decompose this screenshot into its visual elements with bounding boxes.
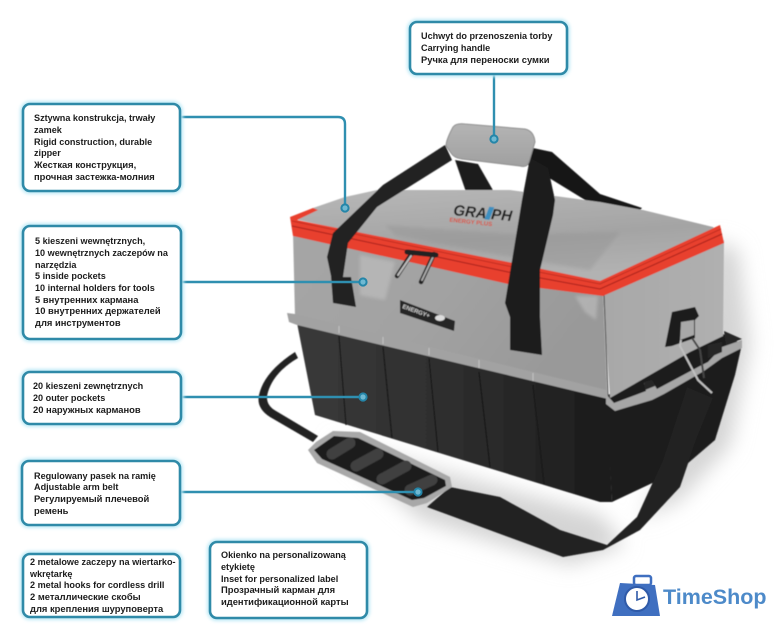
callout: rigid construction: Sztywna konstrukcja, trwały bbox=[34, 113, 156, 123]
trim ticks bbox=[339, 326, 533, 381]
energy label: ENERGY+ bbox=[401, 304, 431, 320]
callout: metal hooks: 2 металлические скобы bbox=[30, 591, 141, 602]
callout: rigid construction: zipper bbox=[34, 148, 61, 158]
callout: adjustable belt: Regulowany pasek na ramię bbox=[34, 471, 156, 481]
callout: label inset: Прозрачный карман для bbox=[221, 584, 335, 595]
side face upper grey bbox=[603, 240, 724, 398]
fold highlights bbox=[360, 255, 598, 320]
brand logo on lid: PH bbox=[490, 206, 514, 225]
callout: inside pockets: для инструментов bbox=[35, 317, 121, 328]
callout: label inset bbox=[210, 542, 367, 618]
lid bbox=[290, 190, 722, 285]
red zipper bbox=[290, 208, 724, 296]
grey scalloped trim side bbox=[606, 340, 742, 411]
front handle strap bbox=[327, 145, 452, 307]
callout connector lines bbox=[180, 74, 494, 492]
icon: bag with clock bbox=[612, 576, 660, 616]
callout: rigid construction: Жесткая конструкция, bbox=[33, 159, 136, 170]
bag drop shadow bbox=[330, 240, 750, 565]
callout: adjustable belt: ремень bbox=[34, 505, 69, 516]
callout: outer pockets: 20 outer pockets bbox=[33, 393, 105, 403]
lid shading bbox=[385, 225, 620, 270]
callout: adjustable belt: Adjustable arm belt bbox=[34, 482, 118, 492]
padded shoulder piece bbox=[308, 431, 452, 507]
callout: carrying handle: Carrying handle bbox=[421, 43, 490, 53]
energy label bbox=[400, 300, 455, 331]
callout: inside pockets bbox=[23, 226, 181, 339]
callout: metal hooks: 2 metalowe zaczepy na wiertarko- bbox=[30, 557, 176, 567]
black side pockets bbox=[606, 334, 742, 502]
rear handle straps bbox=[455, 148, 642, 214]
pocket seams bbox=[339, 336, 544, 484]
callout dots bbox=[341, 135, 498, 496]
callout: rigid construction: zamek bbox=[34, 125, 63, 135]
callout: metal hooks bbox=[23, 554, 180, 617]
zipper pulls bbox=[397, 252, 436, 282]
callout: label inset: идентификационной карты bbox=[221, 596, 349, 607]
callout: outer pockets: 20 наружных карманов bbox=[33, 404, 141, 415]
TimeShop logo: TimeShop bbox=[663, 585, 767, 609]
callout: outer pockets bbox=[23, 372, 181, 424]
callout: label inset: Inset for personalized label bbox=[221, 574, 338, 584]
brand logo on lid: ENERGY PLUS bbox=[449, 218, 492, 228]
callout: rigid construction: прочная застежка-молния bbox=[34, 171, 155, 182]
callout: inside pockets: 10 внутренних держателей bbox=[35, 305, 161, 316]
front face upper grey bbox=[293, 232, 607, 392]
callout: inside pockets: 5 kieszeni wewnętrznych, bbox=[35, 236, 145, 246]
side pocket openings bbox=[644, 331, 742, 390]
callout: carrying handle bbox=[410, 22, 567, 74]
callout: rigid construction bbox=[23, 104, 180, 191]
carrying handle pad bbox=[446, 124, 535, 166]
grey trim front bbox=[287, 313, 608, 399]
corner seam bbox=[604, 295, 608, 396]
callout: label inset: etykietę bbox=[221, 562, 255, 572]
main shoulder strap bbox=[427, 387, 713, 557]
left shoulder strap bbox=[258, 352, 318, 442]
callout: inside pockets: 10 internal holders for tools bbox=[35, 283, 155, 293]
callout: metal hooks: 2 metal hooks for cordless drill bbox=[30, 580, 164, 590]
brand logo on lid bbox=[449, 202, 514, 230]
shoulder strap buckle and carabiner bbox=[665, 307, 712, 393]
TimeShop logo bbox=[612, 576, 767, 616]
callout: inside pockets: 10 wewnętrznych zaczepów na bbox=[35, 248, 169, 258]
brand logo on lid: GRA bbox=[453, 202, 488, 222]
black outer pockets front bbox=[297, 323, 612, 502]
callout: adjustable belt bbox=[22, 461, 180, 525]
callout: adjustable belt: Регулируемый плечевой bbox=[34, 493, 150, 504]
callout: outer pockets: 20 kieszeni zewnętrznych bbox=[33, 381, 143, 391]
tool bag illustration bbox=[258, 124, 742, 557]
callout: carrying handle: Ручка для переноски сумки bbox=[421, 54, 550, 65]
callout: metal hooks: wkrętarkę bbox=[29, 569, 72, 579]
right handle strap bbox=[505, 158, 555, 355]
callout: inside pockets: narzędzia bbox=[35, 260, 77, 270]
callout: carrying handle: Uchwyt do przenoszenia torby bbox=[421, 31, 553, 41]
callout: metal hooks: для крепления шуруповерта bbox=[30, 603, 164, 614]
callout: inside pockets: 5 inside pockets bbox=[35, 271, 106, 281]
callout: inside pockets: 5 внутренних кармана bbox=[35, 294, 139, 305]
callout: rigid construction: Rigid construction, durable bbox=[34, 137, 152, 147]
callout: label inset: Okienko na personalizowaną bbox=[221, 550, 347, 560]
